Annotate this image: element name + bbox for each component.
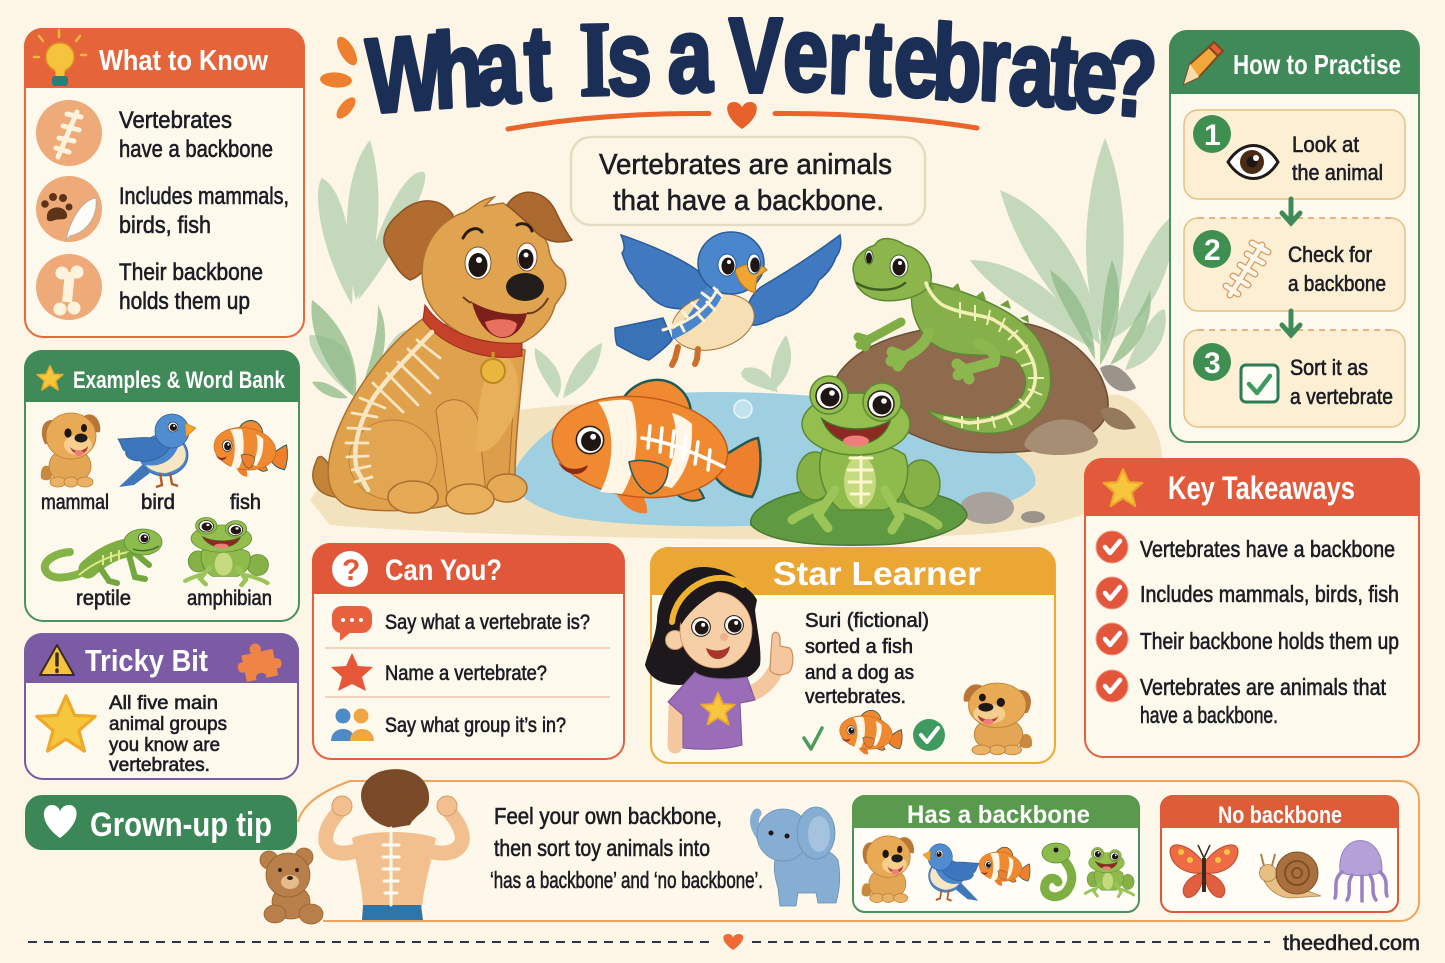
illustration: child flexing (326, 769, 462, 920)
header (24, 28, 304, 88)
illustration: lizard with spine on rock (853, 239, 1051, 433)
left arm (675, 708, 676, 746)
icon: jellyfish (1335, 840, 1387, 901)
illustration: elephant (755, 807, 840, 906)
sand (310, 395, 1162, 539)
tip text (490, 803, 763, 893)
icon: eye (1228, 146, 1278, 178)
icon: snail (1260, 852, 1321, 898)
panel: has a backbone: Has a backbone (907, 801, 1090, 829)
panel: can you: Can You? (385, 554, 502, 587)
panel: no backbone: No backbone (1218, 802, 1342, 829)
illustration: bird with spine (615, 232, 841, 365)
right arm and hand (745, 668, 777, 695)
learner text: Suri (fictional) (805, 609, 929, 632)
collar (423, 305, 522, 358)
title accents (320, 34, 361, 122)
panel: examples and word bank (24, 350, 300, 621)
panel: what to know: birds, fish (119, 212, 211, 239)
panel: examples and word bank: fish (230, 491, 261, 514)
icon: puzzle piece (234, 639, 284, 683)
icon: light bulb (34, 30, 86, 86)
panel: how to practise (1169, 30, 1419, 442)
icon: dog (964, 683, 1032, 755)
icon: mammal (41, 413, 100, 487)
icon: butterfly (1170, 845, 1238, 897)
icon: question: ? (342, 554, 360, 587)
panel: what to know: Vertebrates (119, 107, 232, 134)
tricky text: All five main (109, 692, 218, 714)
step 1: Look at (1292, 132, 1359, 157)
tip label (25, 795, 297, 850)
subtitle callout (571, 137, 925, 225)
bubble (734, 400, 752, 418)
takeaway 4: have a backbone. (1140, 702, 1278, 728)
icon: people (331, 708, 374, 741)
footer: theedhed.com (1283, 932, 1420, 955)
step 3: 3 (1204, 347, 1221, 380)
tricky text: you know are (109, 734, 220, 756)
panel: how to practise: How to Practise (1233, 49, 1401, 80)
step 3 (1184, 330, 1405, 427)
panel: what to know (24, 28, 304, 337)
tricky text: animal groups (109, 713, 227, 735)
illustration: fish with spine (547, 380, 760, 513)
step 3: a vertebrate (1290, 384, 1393, 409)
subtitle callout: that have a backbone. (613, 185, 884, 217)
illustration: frog on lily pad (751, 376, 967, 545)
icon: spine (36, 100, 102, 166)
icon: checkbox (1241, 365, 1278, 402)
hair (645, 567, 760, 685)
takeaway 3: Their backbone holds them up (1140, 628, 1399, 654)
panel: no backbone (1160, 795, 1398, 912)
body and tail (912, 280, 1051, 433)
panel: can you: Say what group it’s in? (385, 714, 566, 737)
icon: reptile (45, 529, 162, 583)
takeaway 3 (1096, 623, 1399, 655)
panel: what to know: have a backbone (119, 136, 273, 163)
arrow: step 2 to 3 (1282, 311, 1300, 335)
icon: check circle (913, 719, 945, 751)
illustration: teddy bear (260, 848, 323, 924)
icon: upright lizard (1042, 843, 1072, 897)
panel: grown-up tip (25, 769, 1419, 924)
takeaway 4: Vertebrates are animals that (1140, 674, 1387, 700)
mouth (472, 302, 527, 338)
scene background (309, 138, 1175, 539)
tricky text: vertebrates. (109, 754, 210, 776)
icon: fish (212, 421, 287, 477)
subtitle callout: Vertebrates are animals (599, 149, 892, 181)
icon: star (1104, 469, 1142, 506)
pond (513, 392, 1036, 526)
plants (309, 138, 1175, 398)
icon: red star (331, 653, 373, 691)
icon: question (332, 551, 368, 587)
panel: examples and word bank: reptile (76, 587, 131, 610)
icon: star (37, 696, 95, 751)
takeaway 4 (1096, 670, 1387, 728)
panel: key takeaways: Key Takeaways (1168, 470, 1355, 506)
panel: what to know: holds them up (119, 288, 250, 315)
illustration: dog with spine (313, 192, 572, 514)
icon: pencil (1184, 42, 1223, 84)
header (24, 633, 299, 683)
panel: has a backbone (852, 795, 1139, 912)
step 1: the animal (1292, 160, 1383, 185)
step 1: 1 (1204, 119, 1221, 152)
spine (926, 283, 1035, 423)
tip label: Grown-up tip (90, 806, 272, 844)
icon: bone (36, 254, 102, 320)
tip text: ‘has a backbone’ and ‘no backbone’. (490, 867, 763, 893)
takeaway 2 (1096, 577, 1399, 609)
learner text: and a dog as (805, 661, 914, 684)
ears and head (384, 201, 453, 280)
step 1 (1184, 110, 1405, 199)
header (1169, 30, 1419, 94)
learner text: sorted a fish (805, 635, 913, 658)
panel: examples and word bank: amphibian (187, 587, 272, 610)
icon: star (37, 366, 63, 390)
nose and eyes (506, 273, 544, 301)
learner text: vertebrates. (805, 685, 906, 708)
takeaway 2: Includes mammals, birds, fish (1140, 581, 1399, 607)
panel: examples and word bank: Examples & Word Bank (73, 367, 286, 394)
tip text: then sort toy animals into (494, 835, 710, 861)
icon: tick (804, 728, 822, 749)
icon: fish (838, 710, 902, 754)
tail (313, 457, 344, 498)
panel: what to know: What to Know (99, 45, 268, 77)
footer (28, 932, 1420, 955)
icon: bird (118, 414, 196, 487)
body (328, 318, 525, 511)
far legs (858, 322, 901, 347)
panel: examples and word bank: bird (141, 491, 175, 514)
tricky text (109, 692, 227, 776)
face (666, 630, 684, 650)
icon: backbone (1226, 243, 1268, 295)
tip text: Feel your own backbone, (494, 803, 722, 829)
step 2: Check for (1288, 242, 1372, 267)
panel: key takeaways (1084, 458, 1419, 757)
panel: tricky bit: Tricky Bit (85, 643, 208, 678)
icon: speech bubble (332, 606, 372, 641)
header (650, 547, 1055, 595)
title underline and heart (508, 102, 977, 129)
panel: can you: Name a vertebrate? (385, 662, 547, 685)
icon: amphibian (186, 517, 268, 585)
panel: can you (312, 543, 624, 759)
rock (836, 322, 1108, 453)
panel: examples and word bank: mammal (41, 491, 109, 514)
step 2: a backbone (1288, 271, 1386, 296)
learner text (805, 609, 929, 708)
panel: star learner: Star Learner (773, 555, 981, 592)
spine (355, 332, 432, 490)
illustration: Suri (645, 567, 793, 749)
panel: can you: Say what a vertebrate is? (385, 611, 590, 634)
shirt (668, 672, 755, 749)
head (853, 239, 931, 301)
near legs (891, 333, 929, 366)
panel: tricky bit (24, 633, 299, 779)
header (312, 543, 624, 594)
header (24, 350, 300, 402)
icon: warning (40, 645, 74, 675)
arrow: step 1 to 2 (1282, 199, 1300, 223)
header (1084, 458, 1419, 516)
takeaway 1 (1096, 531, 1395, 563)
step 3: Sort it as (1290, 355, 1368, 380)
step 2 (1184, 218, 1405, 311)
panel: what to know: Includes mammals, (119, 183, 289, 210)
icon: paw and feather (36, 176, 102, 242)
takeaway 1: Vertebrates have a backbone (1140, 536, 1395, 562)
panel: star learner (645, 547, 1055, 763)
step 2: 2 (1204, 234, 1221, 267)
panel: what to know: Their backbone (119, 259, 263, 286)
